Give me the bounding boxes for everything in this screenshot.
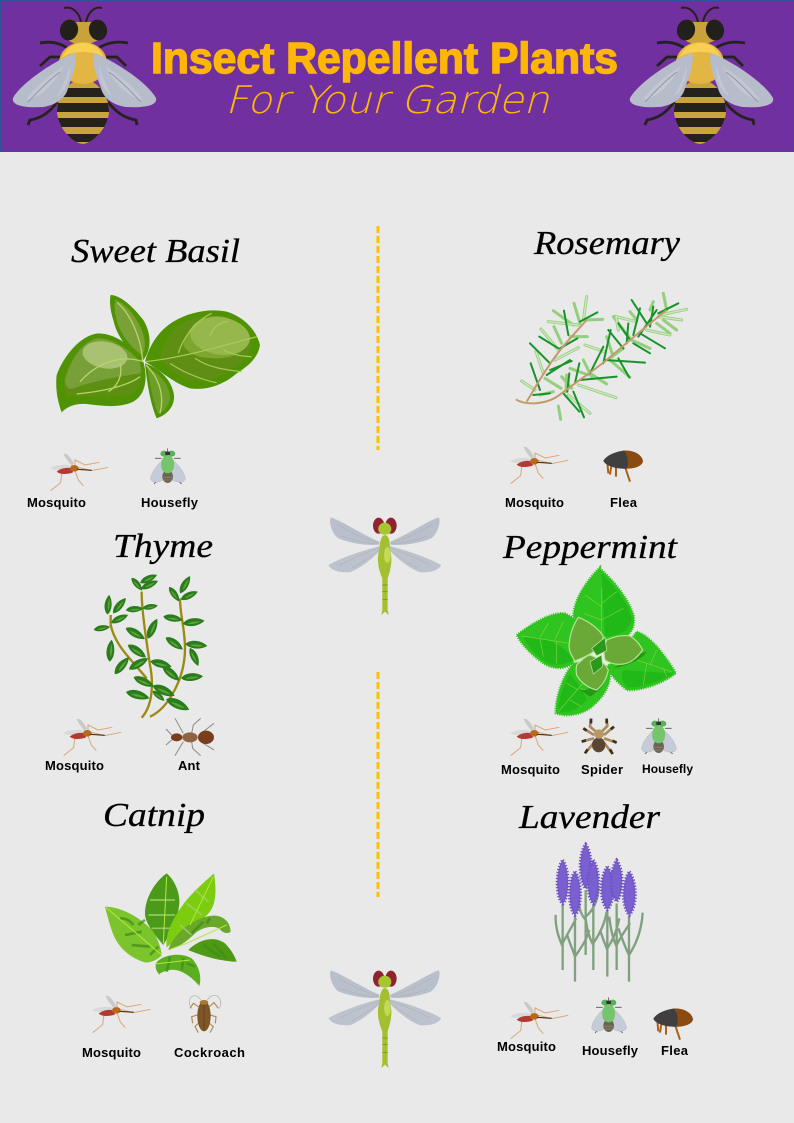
icon: mosquito bbox=[510, 1002, 568, 1039]
label: flea: Flea bbox=[610, 495, 638, 510]
icon: dragonfly lower bbox=[329, 970, 441, 1068]
heading: peppermint: Peppermint bbox=[502, 529, 679, 566]
icon: flea bbox=[603, 450, 643, 482]
heading: lavender: Lavender bbox=[518, 799, 661, 836]
label: cockroach: Cockroach bbox=[174, 1045, 245, 1060]
plant: lavender bunch bbox=[556, 844, 643, 982]
label: mosquito: Mosquito bbox=[505, 495, 564, 510]
panel: catnip bbox=[82, 797, 245, 1060]
label: mosquito: Mosquito bbox=[45, 758, 104, 773]
plant: basil leaves bbox=[56, 295, 260, 418]
heading: rosemary: Rosemary bbox=[533, 225, 681, 262]
plant: catnip leaves bbox=[105, 873, 237, 986]
icon: ant bbox=[166, 718, 214, 756]
icon: housefly bbox=[592, 997, 626, 1033]
icon: housefly bbox=[642, 718, 676, 754]
plant: rosemary sprig bbox=[516, 293, 687, 419]
header banner bbox=[0, 0, 794, 152]
icon: bee left bbox=[13, 8, 156, 144]
heading: thyme: Thyme bbox=[113, 528, 213, 565]
plant: thyme sprig bbox=[93, 572, 208, 718]
title: Insect Repellent Plants bbox=[151, 34, 618, 83]
icon: bee right bbox=[630, 8, 773, 144]
icon: mosquito bbox=[92, 996, 150, 1033]
plant: peppermint leaves bbox=[517, 567, 676, 715]
icon: mosquito bbox=[50, 454, 108, 491]
label: housefly: Housefly bbox=[642, 762, 693, 776]
divider: lower dashed line bbox=[376, 672, 380, 897]
label: mosquito: Mosquito bbox=[497, 1039, 556, 1054]
heading: sweet basil: Sweet Basil bbox=[71, 233, 240, 270]
label: mosquito: Mosquito bbox=[501, 762, 560, 777]
heading: catnip: Catnip bbox=[103, 797, 205, 834]
panel: lavender bbox=[497, 799, 693, 1058]
icon: housefly bbox=[151, 448, 185, 484]
panel: thyme bbox=[45, 528, 214, 773]
label: mosquito: Mosquito bbox=[27, 495, 86, 510]
label: spider: Spider bbox=[581, 762, 623, 777]
icon: cockroach bbox=[189, 995, 221, 1033]
panel: rosemary bbox=[505, 225, 687, 510]
icon: mosquito bbox=[510, 447, 568, 484]
icon: mosquito bbox=[63, 719, 121, 756]
icon: spider bbox=[582, 719, 617, 754]
icon: flea bbox=[653, 1008, 693, 1040]
subtitle: For Your Garden bbox=[225, 78, 550, 122]
panel: sweet basil bbox=[27, 233, 260, 510]
icon: dragonfly upper bbox=[329, 517, 441, 615]
label: mosquito: Mosquito bbox=[82, 1045, 141, 1060]
panel: peppermint bbox=[501, 529, 693, 777]
label: housefly: Housefly bbox=[582, 1043, 639, 1058]
label: flea: Flea bbox=[661, 1043, 689, 1058]
divider: upper dashed line bbox=[376, 226, 380, 450]
label: ant: Ant bbox=[178, 758, 201, 773]
label: housefly: Housefly bbox=[141, 495, 199, 510]
icon: mosquito bbox=[510, 719, 568, 756]
